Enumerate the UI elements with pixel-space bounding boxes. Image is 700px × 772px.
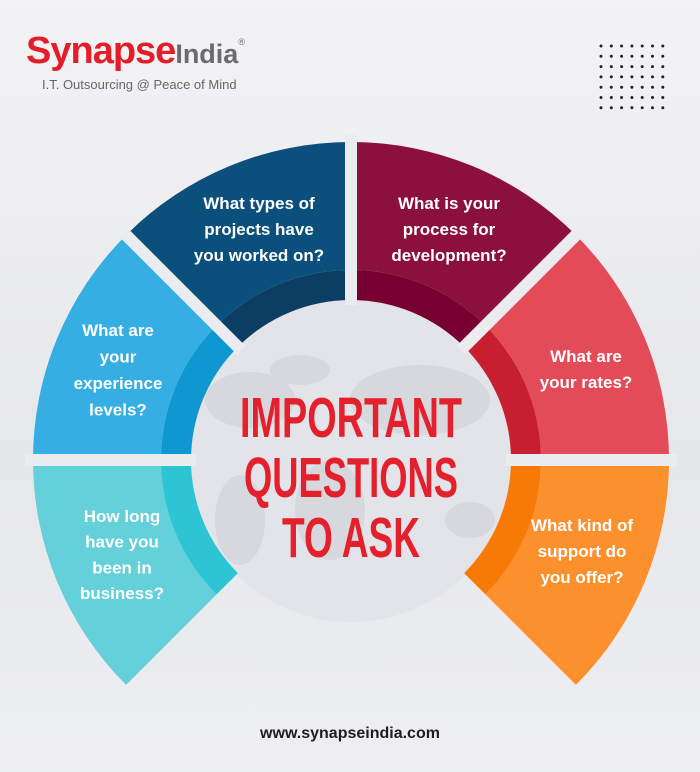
text: business: have you [85,533,159,552]
title: TO ASK [282,506,420,570]
text: support: support do [538,542,626,561]
text: support: What kind of [531,516,633,535]
text: support: you offer? [540,568,624,587]
text: types of projects: What types of [203,194,315,213]
text: rates: What are [550,347,622,366]
text: rates: your rates? [540,373,632,392]
text: experience: your [100,348,137,366]
question texts [74,194,633,603]
title: QUESTIONS [244,446,458,510]
tagline: I.T. Outsourcing @ Peace of Mind [42,77,237,92]
segment: process for development [351,142,576,347]
text: types of projects: projects have [204,220,314,239]
center circle [189,298,513,622]
segment: support [464,460,669,685]
segment: how long in business [33,460,238,685]
text: process: process for [403,220,496,239]
text: experience: levels? [89,400,147,420]
world map hint [205,355,495,565]
title: IMPORTANT [240,386,462,450]
title [240,386,462,570]
text: business: business? [80,584,164,603]
segment: experience levels [33,235,238,460]
text: business: been in [92,558,152,577]
text: process: What is your [398,194,500,213]
text: experience: experience [74,374,162,393]
logo wordmark: SynapseIndia® [26,30,245,72]
dot grid decoration [600,44,664,110]
text: process: development? [391,246,507,265]
text: business: How long [84,507,160,526]
logo [26,30,245,92]
text: types of projects: you worked on? [194,246,324,265]
footer url: www.synapseindia.com [260,725,440,742]
segment: types of projects [126,142,351,347]
text: experience: What are [82,321,154,340]
segment: rates [464,235,669,460]
